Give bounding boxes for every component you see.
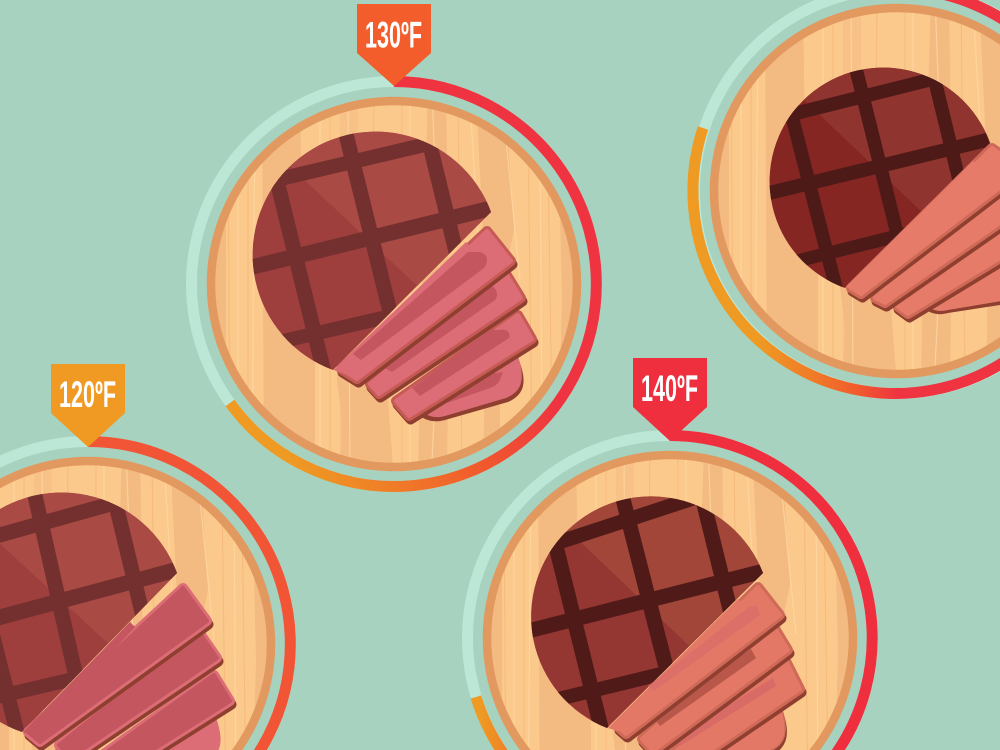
temperature ring: 140 degrees — [468, 436, 872, 750]
wooden board — [205, 90, 585, 480]
wooden board — [481, 444, 861, 750]
plate: 140 degrees F — [468, 358, 872, 750]
temperature pin: 120 degrees — [51, 364, 125, 447]
temperature ring: well-done — [693, 0, 1000, 394]
slice top edge along steak cut: 120 degrees — [23, 622, 135, 736]
temperature pin: 130 degrees — [357, 4, 431, 86]
plate: well-done (no pin visible) — [693, 0, 1000, 394]
steak: rare grill-marked — [252, 132, 491, 370]
steak slices: 130 degrees — [334, 231, 534, 421]
temperature ring: 120 degrees — [0, 442, 290, 750]
slice top edge along steak cut: well-done — [846, 161, 979, 291]
steak: well-done grill-marked — [770, 68, 990, 288]
temperature pin: 140 degrees: 140ºF — [641, 368, 698, 409]
steak slices: 120 degrees — [23, 588, 232, 750]
steak: medium grill-marked — [531, 496, 763, 728]
plate: 130 degrees F — [192, 4, 596, 486]
plate: 120 degrees F — [0, 364, 290, 750]
steak: blue grill-marked — [0, 492, 177, 732]
temperature pin: 130 degrees: 130ºF — [365, 14, 422, 56]
wooden board — [0, 450, 279, 750]
temperature pin: 140 degrees — [633, 358, 707, 441]
steak slices: well-done — [846, 148, 1000, 318]
slice top edge along steak cut: 140 degrees — [608, 599, 744, 732]
temperature pin: 120 degrees: 120ºF — [59, 374, 116, 415]
temperature ring: 130 degrees — [192, 82, 596, 486]
wooden board — [708, 0, 1000, 387]
steak slices: 140 degrees — [608, 587, 802, 750]
slice top edge along steak cut: 130 degrees — [334, 242, 472, 374]
